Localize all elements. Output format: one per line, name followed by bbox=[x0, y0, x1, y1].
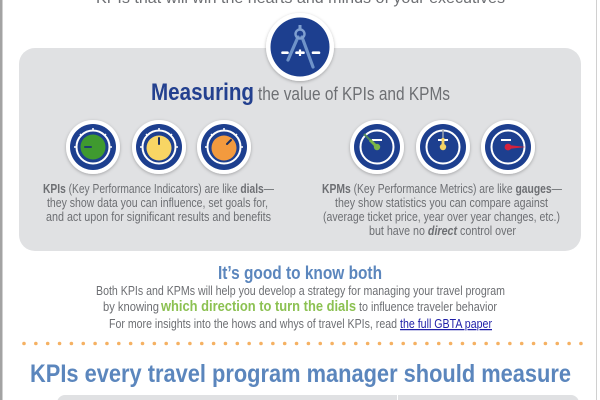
text: both paragraph: to influence traveler behavior bbox=[359, 300, 497, 314]
text: both paragraph: by knowing bbox=[103, 300, 159, 314]
icon: compass bbox=[266, 13, 334, 81]
icon: orange dial bbox=[197, 120, 251, 174]
text: KPIs description bbox=[43, 182, 274, 224]
panel: bottom table bbox=[57, 395, 579, 400]
text: both paragraph bbox=[96, 284, 505, 315]
text: both paragraph: Both KPIs and KPMs will help you develop a strategy for managing your travel program bbox=[96, 284, 505, 298]
text: KPMs description: (average ticket price, year over year changes, etc.) bbox=[323, 210, 560, 224]
heading: good to know both: It’s good to know both bbox=[218, 263, 382, 283]
text: both paragraph: which direction to turn the dials bbox=[160, 298, 356, 315]
text: KPIs description: KPIs (Key Performance Indicators) are like dials— bbox=[43, 182, 274, 196]
text: KPMs description: they show statistics you can compare against bbox=[335, 196, 548, 210]
heading: measuring: the value of KPIs and KPMs bbox=[258, 84, 450, 104]
icon: red gauge bbox=[481, 120, 535, 174]
text: KPMs description: KPMs (Key Performance Metrics) are like gauges— bbox=[322, 182, 562, 196]
text: KPMs description: but have no direct control over bbox=[369, 224, 516, 238]
dials: KPIs bbox=[66, 120, 251, 174]
icon: green dial bbox=[66, 120, 120, 174]
text: further reading link: the full GBTA paper bbox=[400, 317, 492, 331]
icon: green gauge bbox=[350, 120, 404, 174]
icon: yellow gauge bbox=[416, 120, 470, 174]
text: KPIs description: and act upon for significant results and benefits bbox=[46, 210, 271, 224]
text: KPMs description bbox=[322, 182, 562, 238]
heading: measuring: Measuring bbox=[151, 79, 254, 106]
icon: yellow dial bbox=[132, 120, 186, 174]
divider: orange dots bbox=[24, 342, 581, 345]
gauges: KPMs bbox=[350, 120, 535, 174]
text: further reading link: For more insights into the hows and whys of travel KPIs, read bbox=[109, 317, 397, 331]
panel: measuring bbox=[19, 13, 581, 251]
text: KPIs description: they show data you can influence, set goals for, bbox=[47, 196, 268, 210]
heading: measuring bbox=[151, 79, 450, 106]
